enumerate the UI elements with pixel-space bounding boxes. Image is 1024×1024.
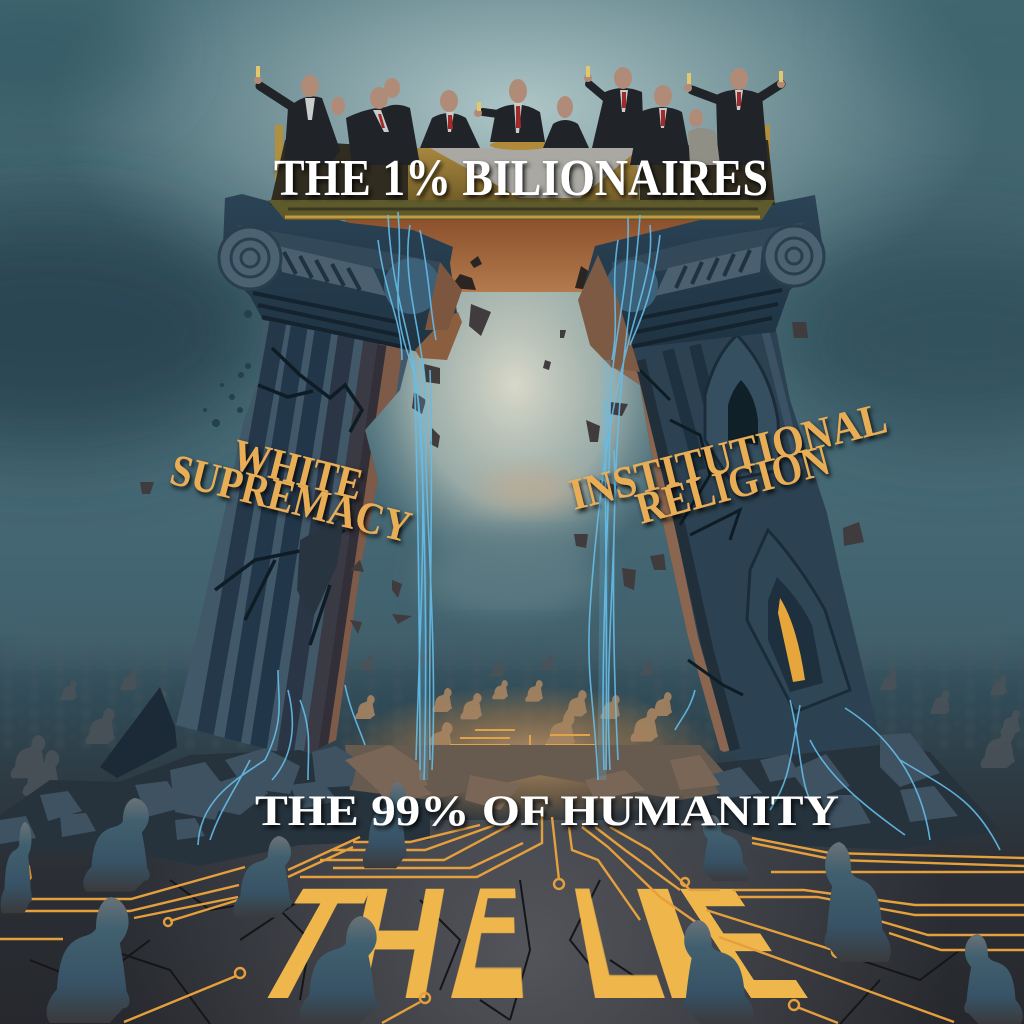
ground [0, 625, 1024, 1024]
flutes [205, 322, 392, 755]
figure [363, 782, 407, 868]
table slab on the pillars [268, 125, 775, 220]
heads [254, 67, 785, 127]
figure [233, 836, 292, 918]
shirts and red ties [305, 90, 743, 133]
left pillar: white supremacy [176, 194, 462, 758]
champagne glasses [256, 66, 783, 111]
circuit traces [0, 810, 1024, 1023]
figure [702, 815, 749, 881]
label: top tier: THE 1% BILIONAIRES [274, 150, 768, 207]
blue energy wires [198, 212, 1000, 850]
figure [47, 897, 130, 1023]
dark legs and gold frame behind text [270, 140, 775, 205]
gothic window, upper [705, 335, 780, 480]
man 7 [543, 120, 589, 148]
capital with volute [580, 195, 825, 352]
figure [824, 842, 891, 962]
man 6 [490, 104, 545, 142]
figure [964, 934, 1023, 1024]
man 5 [420, 113, 480, 148]
figure [83, 798, 150, 892]
falling debris [140, 304, 864, 634]
man 8 [592, 88, 644, 148]
ground text: THE LIE [234, 864, 812, 998]
man 1 [284, 96, 340, 165]
figure [299, 916, 378, 1024]
label: bottom tier: THE 99% OF HUMANITY [255, 788, 839, 835]
man 11 [716, 90, 768, 165]
table top [408, 148, 640, 205]
man 9 [630, 107, 692, 165]
label: institutional religion: RELIGION [631, 434, 835, 534]
man 2 back [372, 105, 420, 165]
figure [1, 822, 32, 913]
sky [0, 0, 1024, 660]
table underside [340, 216, 720, 292]
chairs [275, 125, 770, 205]
central glowing traces on the horizon [450, 730, 595, 750]
right pillar: institutional religion [578, 195, 878, 762]
cracks [215, 348, 362, 645]
rubble piles [0, 687, 1000, 866]
fallen block [100, 687, 177, 778]
flutes and warm edge [610, 330, 800, 752]
man 3 [346, 107, 410, 165]
label: institutional religion: INSTITUTIONAL [564, 393, 892, 520]
figure [683, 920, 754, 1024]
label: white supremacy: WHITE [228, 429, 368, 510]
cracks [640, 370, 743, 695]
small lamp on the left [22, 858, 32, 886]
woman [688, 128, 720, 165]
distant crowd of kneeling figures [11, 650, 1020, 796]
billionaires toasting [254, 66, 785, 165]
gothic window, glowing lower [747, 530, 850, 712]
shaft [176, 320, 410, 758]
capital with volute [222, 194, 458, 358]
hooded kneeling figures [1, 782, 1023, 1024]
label: white supremacy: SUPREMACY [166, 444, 416, 552]
shaft [590, 325, 878, 762]
